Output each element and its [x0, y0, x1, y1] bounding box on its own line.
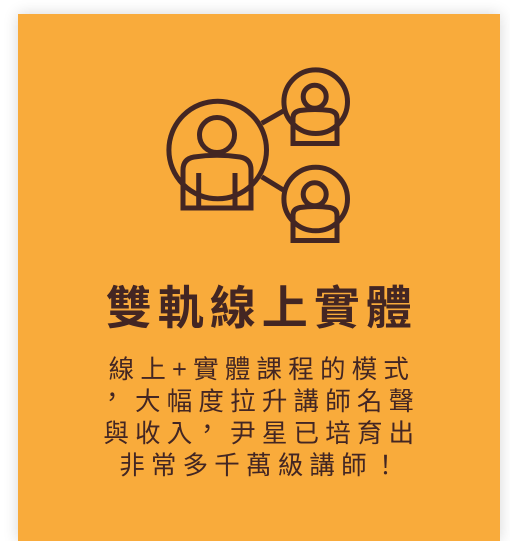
text block: description: 非常多千萬級講師！: [119, 445, 404, 482]
text block: description: 線上+實體課程的模式: [109, 349, 415, 386]
text block: description: [99, 349, 420, 482]
title: 雙軌線上實體: [106, 282, 418, 334]
text block: description: 與收入，尹星已培育出: [103, 409, 420, 450]
text block: description: ，大幅度拉升講師名聲: [99, 377, 420, 418]
